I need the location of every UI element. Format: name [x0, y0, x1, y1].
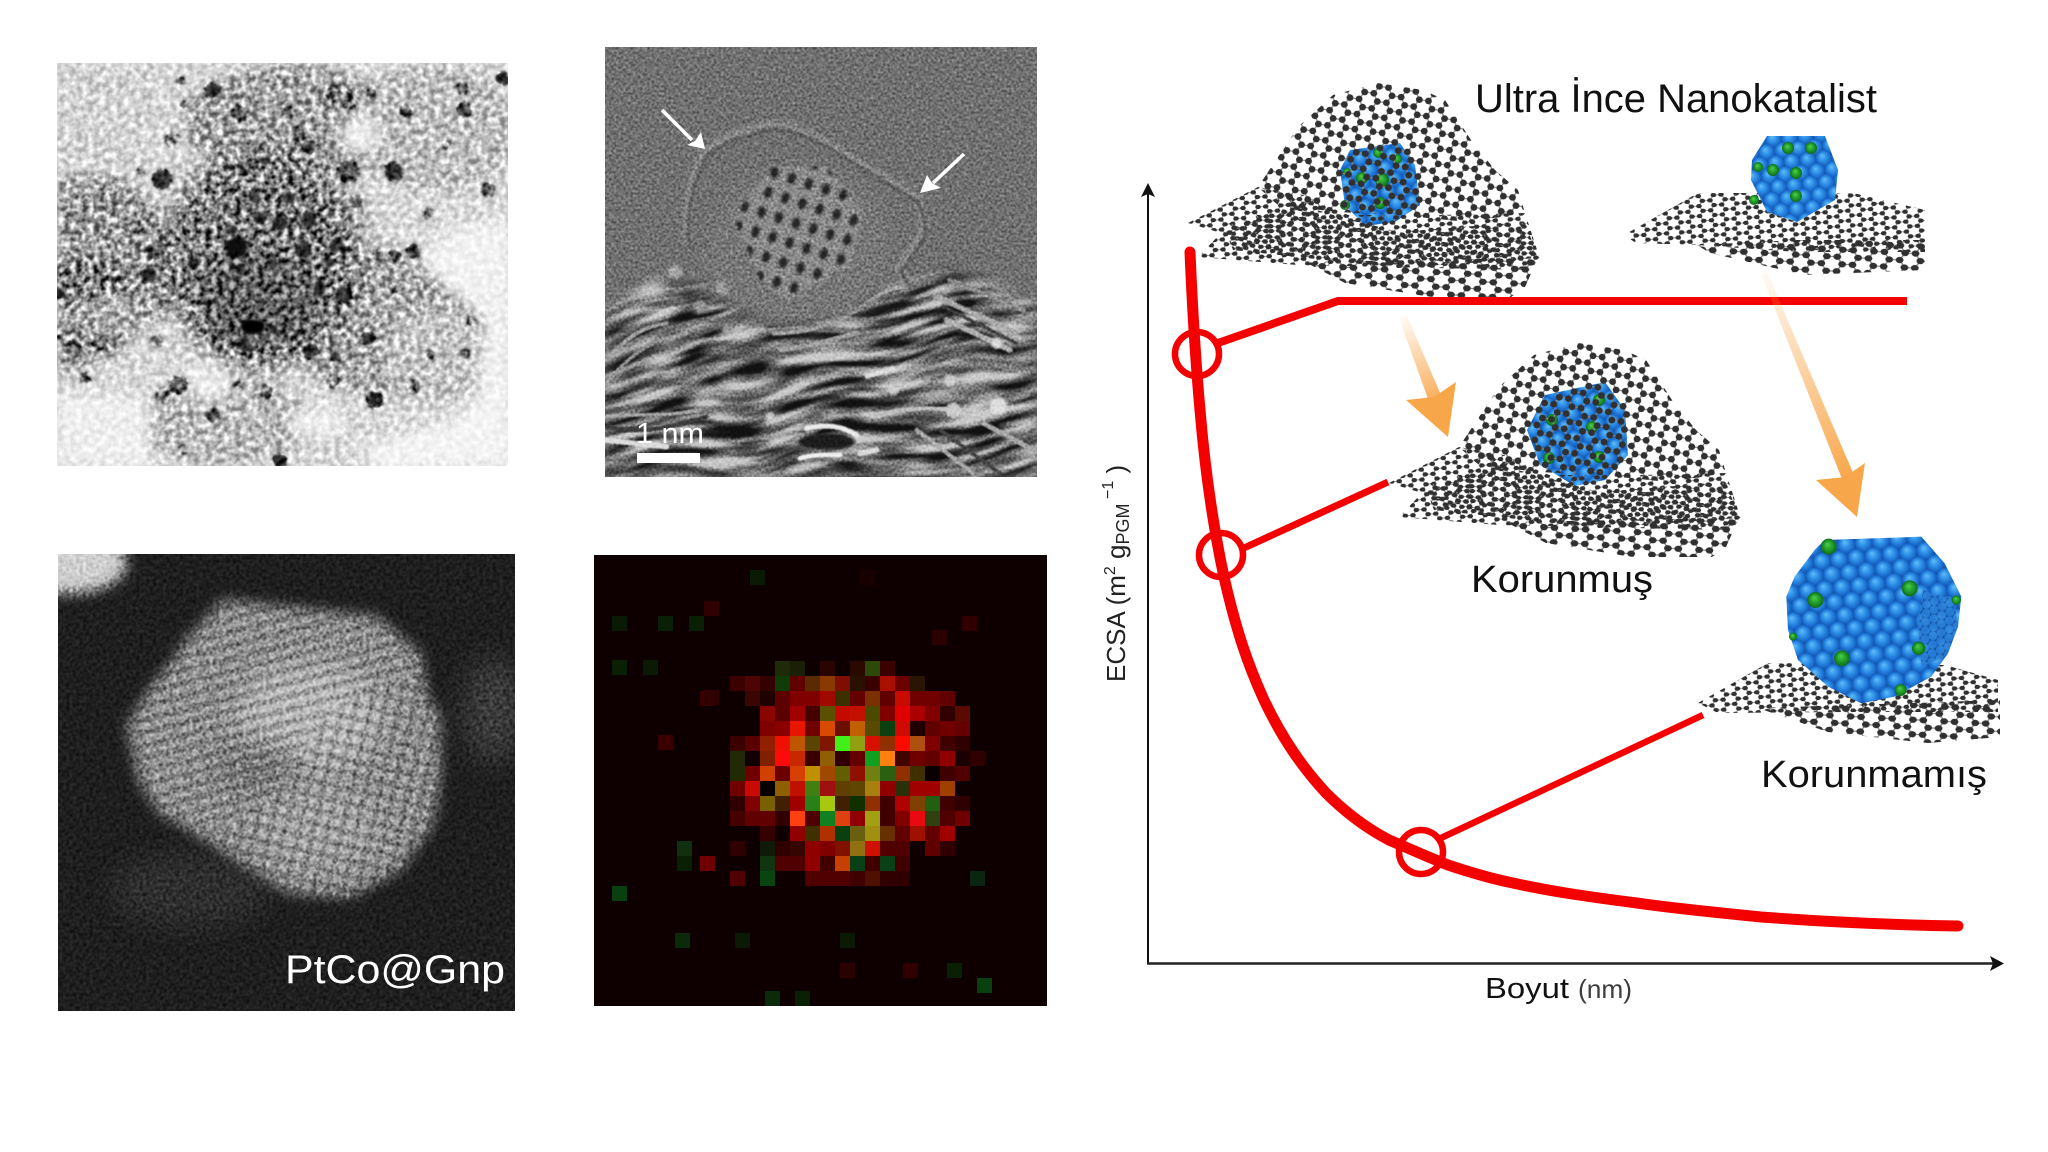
connector lines — [1218, 301, 1907, 838]
nanocatalyst: protected particle after degradation — [1389, 343, 1742, 557]
large blue particle — [1786, 537, 1961, 703]
y axis label: −1 — [1100, 481, 1117, 503]
panel: HAADF-STEM image of PtCo@Gnp particle — [58, 554, 515, 1011]
encapsulating graphene shell — [687, 125, 925, 312]
nanocatalyst: unprotected particle after coarsening — [1698, 537, 2000, 743]
larger particle in dome — [1527, 382, 1628, 486]
label: PtCo@Gnp: PtCo@Gnp — [285, 948, 505, 992]
graphene sheet — [1624, 193, 1925, 275]
x axis label — [1485, 973, 1632, 1005]
y axis label: ) — [1101, 465, 1131, 481]
nanocatalyst: ultrathin unprotected particle on graphene sheet — [1624, 136, 1925, 275]
label: Korunmuş: Korunmuş — [1471, 559, 1653, 601]
chart: ECSA vs size — [1100, 183, 2004, 1005]
graphene sheet — [1698, 663, 2000, 743]
arrow: white arrow upper right — [920, 154, 964, 193]
y axis label: g — [1101, 544, 1131, 566]
label: Korunmamış: Korunmamış — [1761, 754, 1987, 796]
graphene dome and sheet — [1188, 83, 1541, 297]
scale bar and label — [637, 423, 702, 463]
x axis label: (nm) — [1578, 974, 1632, 1004]
panel: HRTEM image of graphene-shell-encapsulated particle — [605, 47, 1037, 477]
x axis with arrow — [1147, 956, 2004, 971]
graphene dome and sheet — [1389, 343, 1742, 557]
small blue particle — [1749, 136, 1838, 222]
scattered dim pixels — [612, 570, 992, 1006]
panel: TEM image of nanoparticles on graphene — [37, 63, 520, 468]
y axis with arrow — [1141, 183, 1155, 964]
red ECSA curve — [1190, 252, 1958, 926]
scale bar and label: 1 nm — [636, 418, 704, 450]
arrow: orange arrow to protected particle — [1399, 316, 1456, 437]
x axis label: Boyut — [1485, 973, 1569, 1005]
heading: Ultra İnce Nanokatalist: Ultra İnce Nanokatalist — [1475, 76, 1877, 121]
y axis label: PGM — [1113, 503, 1133, 544]
y axis label: 2 — [1102, 566, 1119, 575]
arrow: white arrow upper left — [662, 110, 705, 149]
arrow: orange arrow to unprotected particle — [1761, 272, 1865, 517]
particle atomic lattice — [710, 163, 890, 323]
y axis label: ECSA (m — [1101, 575, 1131, 682]
small particle in dome — [1340, 143, 1420, 226]
panel: EDS elemental map (red and green pixels) — [594, 555, 1047, 1006]
red marker circles — [1175, 332, 1443, 874]
nanocatalyst: protected ultrathin particle under graphene dome — [1188, 83, 1541, 297]
